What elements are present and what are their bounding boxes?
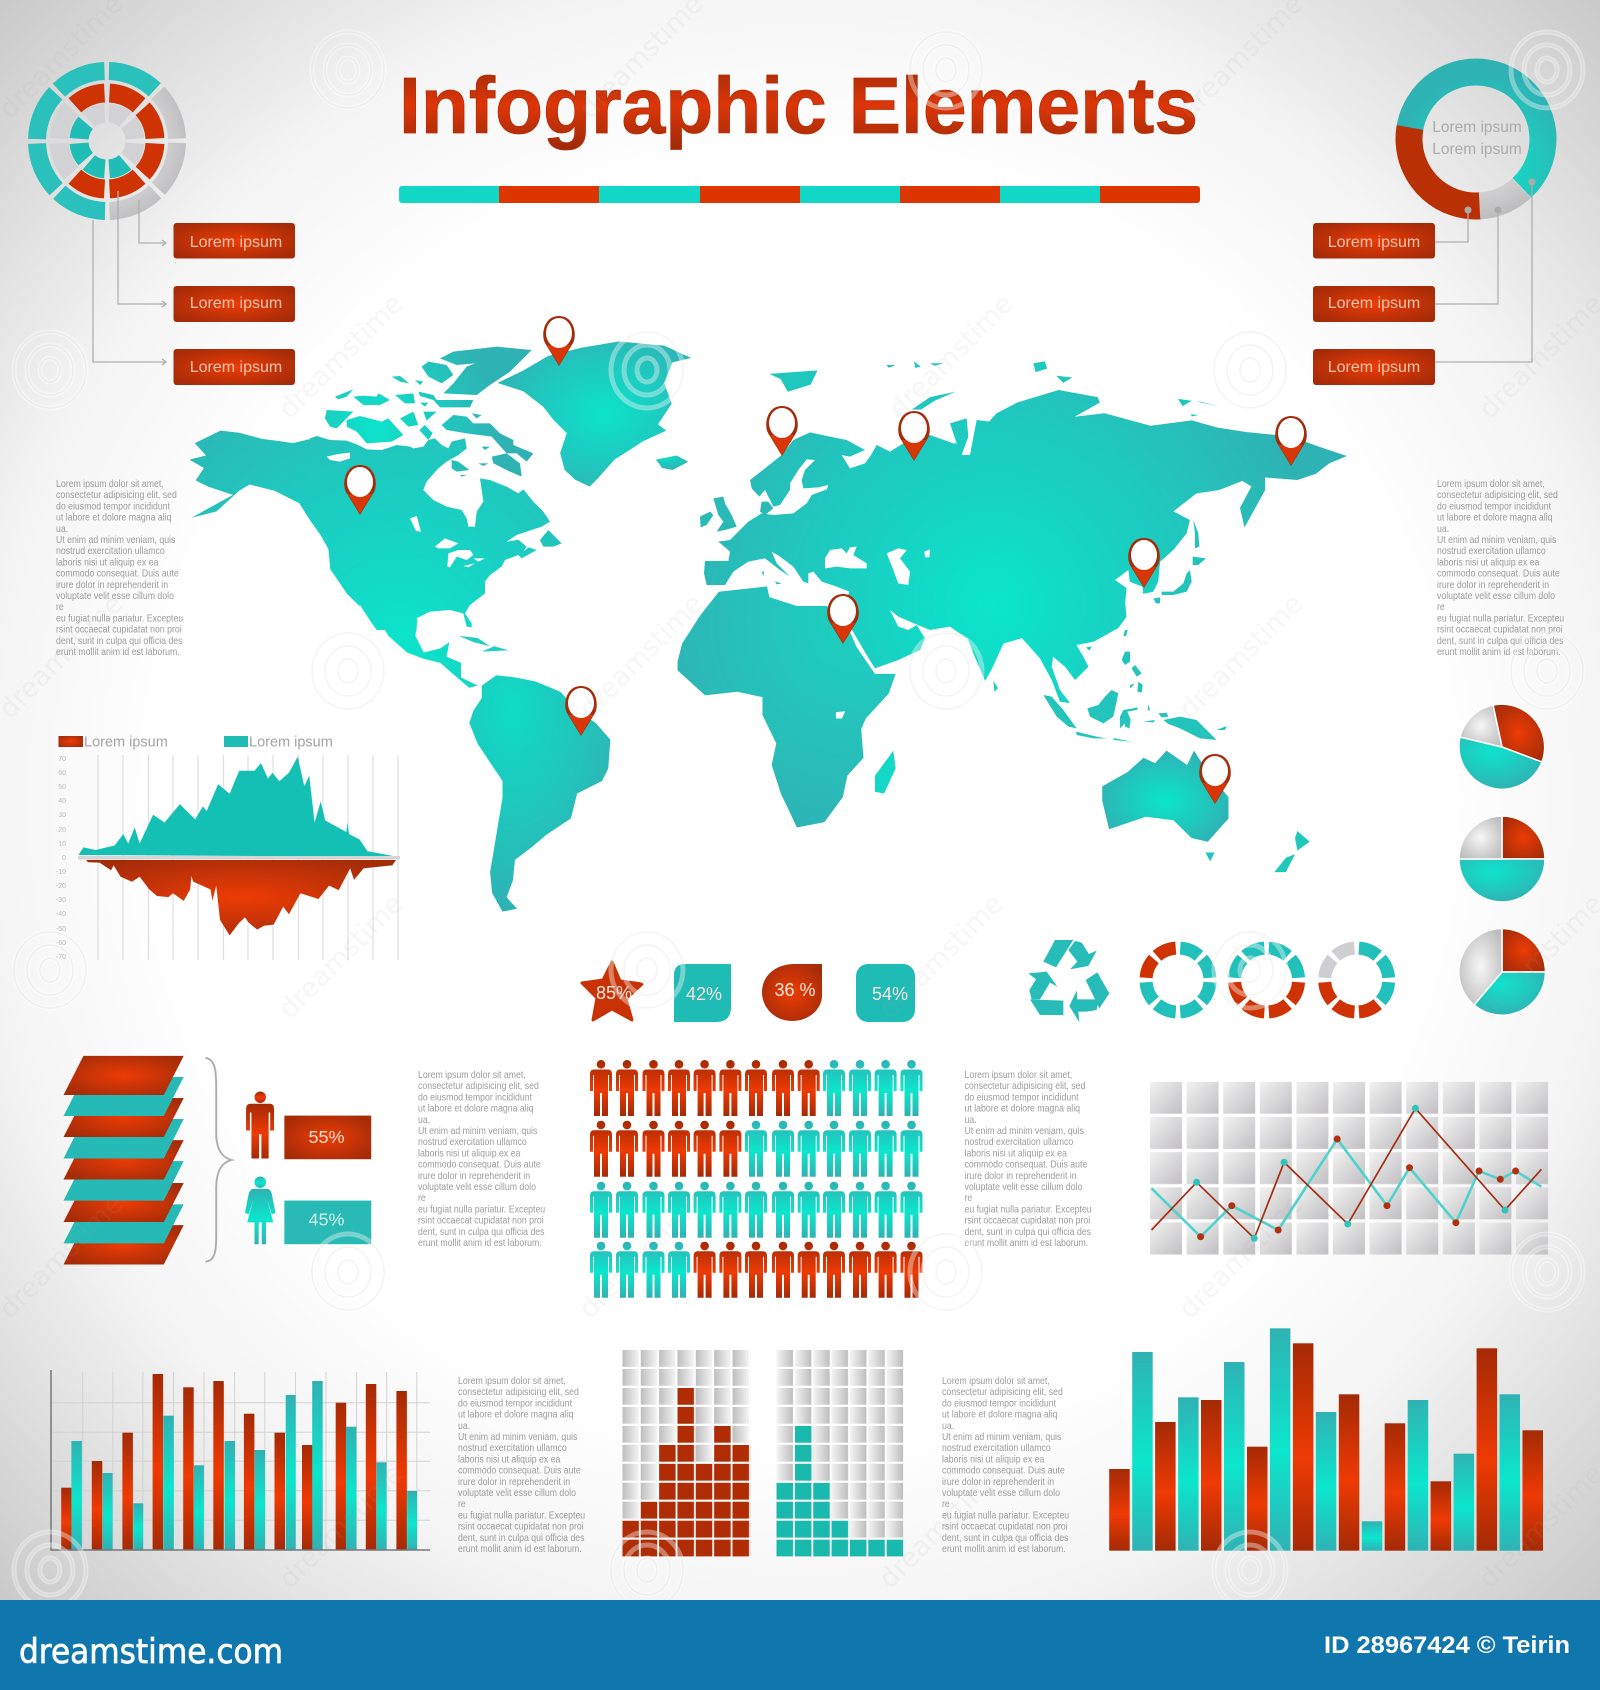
Europe, Russia west and Arabia	[704, 418, 990, 668]
donut chart: top right: Lorem ipsum	[1432, 119, 1522, 136]
text block: right of map: dent, sunt in culpa qui officia des	[1437, 634, 1564, 646]
area chart y axis labels: 20	[58, 827, 66, 834]
text: dreamstime	[883, 288, 1020, 425]
world map	[189, 316, 1347, 912]
text block: left of map: Lorem ipsum dolor sit amet,	[56, 477, 164, 489]
Canadian Arctic islands	[325, 347, 533, 477]
bar chart axes	[51, 1370, 430, 1550]
text block: beside tile charts: do eiusmod tempor incididunt	[942, 1397, 1056, 1409]
pin: Korea	[1128, 538, 1160, 588]
area chart y axis labels: 30	[58, 812, 66, 819]
segmented ring 3	[1312, 935, 1402, 1025]
grouped bar chart	[51, 1370, 430, 1550]
text block: left of map: do eiusmod tempor incididunt	[56, 500, 170, 512]
area chart zero line	[78, 856, 400, 860]
text block: beside people chart: Lorem ipsum dolor sit amet,	[964, 1068, 1072, 1080]
layered stack with gender split	[64, 1056, 371, 1264]
footer logo text: dreamstime.com	[19, 1632, 283, 1672]
text block: left of map: voluptate velit esse cillum dolo	[56, 589, 174, 601]
text block: beside tile charts: irure dolor in reprehenderit in	[942, 1475, 1054, 1487]
text block: beside gender split: do eiusmod tempor incididunt	[418, 1091, 532, 1103]
text block: left of map: ut labore et dolore magna aliq	[56, 511, 172, 523]
text block: left of map: irure dolor in reprehenderit in	[56, 578, 168, 590]
text block: beside grouped bars	[458, 1374, 585, 1554]
people pictogram chart	[590, 1060, 922, 1298]
text block: left of map: ua.	[56, 522, 68, 534]
Africa	[678, 586, 896, 827]
tile column chart: red	[622, 1350, 751, 1556]
map: East and Southeast Asian islands	[1043, 520, 1227, 740]
text: dreamstime	[1173, 1188, 1310, 1325]
text block: left of map: consectetur adipisicing elit, sed	[56, 489, 177, 500]
text block: right of map: ua.	[1437, 522, 1449, 534]
text: dreamstime	[573, 1188, 710, 1325]
text block: beside people chart: irure dolor in reprehenderit in	[964, 1169, 1077, 1181]
label buttons: left	[174, 223, 295, 385]
donut chart: top right: Lorem ipsum	[1432, 141, 1522, 158]
badge: star 85%	[582, 962, 642, 1020]
text block: beside gender split: ua.	[418, 1113, 430, 1125]
area chart y axis labels: -40	[56, 911, 66, 918]
pin: Greenland	[543, 316, 575, 366]
text block: beside gender split: irure dolor in reprehenderit in	[418, 1169, 530, 1181]
area chart y axis labels: -60	[56, 940, 66, 947]
text block: beside grouped bars: consectetur adipisicing elit, sed	[458, 1386, 579, 1397]
connectors: left ring to labels	[93, 191, 166, 365]
text block: beside people chart: dent, sunt in culpa qui officia des	[964, 1225, 1091, 1237]
Lake Victoria	[836, 711, 845, 719]
text block: beside tile charts: commodo consequat. Duis aute	[942, 1464, 1065, 1476]
brace	[206, 1058, 232, 1262]
label buttons: left: Lorem ipsum	[190, 234, 282, 251]
text block: beside grouped bars: irure dolor in reprehenderit in	[458, 1475, 570, 1487]
people row 2	[590, 1121, 922, 1177]
text block: right of map: irure dolor in reprehenderit in	[1437, 578, 1549, 590]
Asia	[967, 390, 1347, 703]
text block: right of map: nostrud exercitation ullamco	[1437, 545, 1546, 556]
label buttons: right: Lorem ipsum	[1328, 359, 1420, 376]
text block: left of map: nostrud exercitation ullamco	[56, 545, 165, 556]
text block: beside people chart: voluptate velit esse cillum dolo	[964, 1180, 1082, 1192]
text block: left of map: Ut enim ad minim veniam, quis	[56, 533, 176, 545]
area chart y axis labels: 70	[58, 756, 66, 763]
label buttons: left: Lorem ipsum	[190, 295, 282, 312]
text block: beside gender split: ut labore et dolore magna aliq	[418, 1102, 534, 1114]
Canada and United States	[310, 436, 550, 630]
pie chart 2	[1459, 816, 1545, 902]
text block: beside tile charts: ua.	[942, 1419, 954, 1431]
area chart y axis labels: 10	[58, 841, 66, 848]
text block: left of map: dent, sunt in culpa qui officia des	[56, 634, 183, 646]
Australia	[1102, 751, 1228, 842]
text block: beside grouped bars: dent, sunt in culpa qui officia des	[458, 1531, 585, 1543]
text block: right of map: rsint occaecat cupidatat non proi	[1437, 623, 1563, 635]
text: dreamstime	[1173, 588, 1310, 725]
inland seas	[825, 547, 930, 585]
label buttons: right: Lorem ipsum	[1328, 295, 1420, 312]
pie chart 3	[1459, 928, 1546, 1015]
text block: right of map: consectetur adipisicing elit, sed	[1437, 489, 1558, 500]
text block: beside people chart: Ut enim ad minim veniam, quis	[964, 1124, 1084, 1136]
pin: Egypt	[827, 594, 859, 644]
text block: right of map: do eiusmod tempor incididunt	[1437, 500, 1551, 512]
segmented ring: top left	[8, 42, 206, 240]
pin: Brazil	[565, 686, 597, 736]
text block: beside gender split: eu fugiat nulla pariatur. Excepteu	[418, 1203, 545, 1215]
text block: beside gender split: commodo consequat. Duis aute	[418, 1158, 541, 1170]
line chart markers	[1193, 1105, 1519, 1242]
text block: beside grouped bars: Ut enim ad minim veniam, quis	[458, 1430, 578, 1442]
red bars	[61, 1374, 407, 1550]
label buttons: right: Lorem ipsum	[1328, 234, 1420, 251]
teal area series	[78, 757, 398, 857]
text block: beside tile charts: re	[942, 1498, 950, 1509]
badge: rounded 54%	[856, 964, 915, 1022]
tile column chart: teal	[776, 1350, 905, 1556]
connectors: donut to labels	[1435, 178, 1536, 362]
text block: left of map: laboris nisi ut aliquip ex ea	[56, 556, 159, 568]
text block: beside tile charts	[942, 1374, 1069, 1554]
red line series	[1152, 1108, 1541, 1238]
area chart y axis labels: 60	[58, 770, 66, 777]
text block: right of map: voluptate velit esse cillum dolo	[1437, 589, 1555, 601]
text block: right of map: erunt mollit anim id est laborum.	[1437, 645, 1561, 657]
text block: beside gender split: nostrud exercitation ullamco	[418, 1136, 527, 1147]
donut chart: top right	[1381, 44, 1571, 234]
tiled line chart	[1150, 1082, 1549, 1255]
icon: man	[246, 1092, 274, 1158]
text block: right of map: ut labore et dolore magna aliq	[1437, 511, 1553, 523]
pie chart 1	[1459, 704, 1545, 789]
badge: star 85%: 85%	[596, 983, 632, 1003]
Madagascar	[875, 751, 896, 794]
map: Canada and the Arctic	[310, 347, 562, 630]
area chart y axis labels: 40	[58, 798, 66, 805]
map: Americas, Greenland and Iceland	[189, 341, 691, 912]
text: dreamstime	[273, 1458, 410, 1595]
text block: beside grouped bars: ua.	[458, 1419, 470, 1431]
title: Infographic Elements	[399, 61, 1198, 150]
text block: right of map: eu fugiat nulla pariatur. Excepteu	[1437, 612, 1564, 624]
area chart y axis labels: -10	[56, 869, 66, 876]
teal bars	[71, 1381, 417, 1550]
footer banner	[0, 1600, 1600, 1690]
text block: beside people chart: consectetur adipisicing elit, sed	[964, 1080, 1085, 1091]
teal line series	[1152, 1139, 1541, 1237]
text block: beside people chart: nostrud exercitation ullamco	[964, 1136, 1073, 1147]
red area series	[86, 860, 396, 935]
text block: beside grouped bars: rsint occaecat cupidatat non proi	[458, 1520, 584, 1532]
text: dreamstime	[273, 288, 410, 425]
text block: beside grouped bars: do eiusmod tempor incididunt	[458, 1397, 572, 1409]
text block: beside grouped bars: re	[458, 1498, 466, 1509]
Caribbean islands	[459, 636, 509, 652]
text block: beside tile charts: dent, sunt in culpa qui officia des	[942, 1531, 1069, 1543]
area chart legend: Lorem ipsum	[84, 734, 168, 750]
area chart y axis labels: 50	[58, 784, 66, 791]
pin: East Russia	[1275, 416, 1307, 466]
male share bar	[284, 1116, 371, 1159]
Alaska, western coast and Central America	[189, 431, 478, 688]
text block: beside people chart: commodo consequat. Duis aute	[964, 1158, 1087, 1170]
text block: left of map: erunt mollit anim id est laborum.	[56, 645, 180, 657]
South America	[469, 675, 610, 912]
text block: beside grouped bars: erunt mollit anim id est laborum.	[458, 1542, 582, 1554]
Iceland	[656, 456, 688, 470]
text block: beside gender split: erunt mollit anim id est laborum.	[418, 1236, 542, 1248]
pin: Norway	[766, 406, 798, 456]
text block: beside gender split: voluptate velit esse cillum dolo	[418, 1180, 536, 1192]
map pins	[344, 316, 1307, 804]
area chart legend	[58, 734, 333, 750]
Newfoundland	[540, 530, 562, 547]
text block: beside tile charts: eu fugiat nulla pariatur. Excepteu	[942, 1509, 1069, 1521]
text block: beside grouped bars: laboris nisi ut aliquip ex ea	[458, 1453, 561, 1465]
text block: right of map: Ut enim ad minim veniam, quis	[1437, 533, 1557, 545]
text block: beside people chart: ut labore et dolore magna aliq	[964, 1102, 1080, 1114]
lakes	[327, 453, 540, 630]
icon: woman	[245, 1176, 276, 1244]
badge: square 42%	[674, 964, 731, 1022]
people row 4	[590, 1242, 922, 1298]
text block: right of map: commodo consequat. Duis aute	[1437, 567, 1560, 579]
text block: beside grouped bars: nostrud exercitation ullamco	[458, 1442, 567, 1453]
area chart legend: Lorem ipsum	[249, 734, 333, 750]
large bar chart	[1109, 1328, 1543, 1551]
text block: beside grouped bars: Lorem ipsum dolor sit amet,	[458, 1374, 566, 1386]
area chart y axis labels: -20	[56, 883, 66, 890]
text block: left of map: eu fugiat nulla pariatur. Excepteu	[56, 612, 183, 624]
area chart	[56, 734, 400, 961]
text: dreamstime	[273, 888, 410, 1025]
pin: Australia	[1199, 754, 1231, 804]
badge: rounded 54%: 54%	[872, 984, 908, 1004]
title colour bar	[399, 186, 1200, 203]
area chart y axis labels: -50	[56, 926, 66, 933]
Greenland	[498, 341, 691, 487]
area chart y axis labels	[56, 756, 66, 961]
smaller islands	[993, 681, 1132, 742]
badge: drop 36%	[762, 964, 822, 1021]
text block: right of map: re	[1437, 601, 1445, 612]
text block: beside tile charts: consectetur adipisicing elit, sed	[942, 1386, 1063, 1397]
area chart y axis labels: -70	[56, 954, 66, 961]
layered stack	[64, 1056, 184, 1264]
text block: beside gender split: dent, sunt in culpa qui officia des	[418, 1225, 545, 1237]
text block: beside tile charts: ut labore et dolore magna aliq	[942, 1408, 1058, 1420]
text: dreamstime	[873, 1458, 1010, 1595]
text block: beside gender split: consectetur adipisicing elit, sed	[418, 1080, 539, 1091]
text block: beside grouped bars: ut labore et dolore magna aliq	[458, 1408, 574, 1420]
text block: beside tile charts: Ut enim ad minim veniam, quis	[942, 1430, 1062, 1442]
area chart y axis labels: 0	[62, 855, 66, 862]
text: dreamstime	[573, 588, 710, 725]
text block: beside gender split: Lorem ipsum dolor sit amet,	[418, 1068, 526, 1080]
text block: beside grouped bars: voluptate velit esse cillum dolo	[458, 1486, 576, 1498]
text block: beside people chart: laboris nisi ut aliquip ex ea	[964, 1147, 1068, 1159]
map: Europe and the Middle East	[700, 418, 990, 668]
text: dreamstime	[873, 888, 1010, 1025]
text block: beside tile charts: nostrud exercitation ullamco	[942, 1442, 1051, 1453]
pin: Canada	[344, 465, 376, 515]
text block: beside tile charts: laboris nisi ut aliquip ex ea	[942, 1453, 1045, 1465]
male share bar: 55%	[308, 1127, 344, 1147]
pin: Russia	[898, 411, 930, 461]
text block: left of map: commodo consequat. Duis aute	[56, 567, 179, 579]
text block: beside grouped bars: eu fugiat nulla pariatur. Excepteu	[458, 1509, 585, 1521]
text block: beside people chart: rsint occaecat cupidatat non proi	[964, 1214, 1090, 1226]
area chart y axis labels: -30	[56, 897, 66, 904]
text block: left of map: rsint occaecat cupidatat non proi	[56, 623, 182, 635]
text block: beside tile charts: Lorem ipsum dolor sit amet,	[942, 1374, 1050, 1386]
segmented ring 1	[1133, 935, 1223, 1025]
text block: beside people chart: ua.	[964, 1113, 977, 1125]
Denmark, British Isles and Mediterranean islands	[700, 497, 782, 584]
text block: beside people chart	[964, 1068, 1092, 1248]
text block: left of map: re	[56, 601, 64, 612]
female share bar: 45%	[308, 1209, 344, 1229]
percentage badges	[582, 962, 915, 1022]
text block: beside grouped bars: commodo consequat. Duis aute	[458, 1464, 581, 1476]
text block: right of map: laboris nisi ut aliquip ex ea	[1437, 556, 1540, 568]
text block: beside gender split: rsint occaecat cupidatat non proi	[418, 1214, 544, 1226]
badge: drop 36%: 36 %	[774, 980, 816, 1000]
footer image id: ID 28967424 © Teirin	[1324, 1632, 1570, 1659]
text block: beside people chart: erunt mollit anim id est laborum.	[964, 1236, 1088, 1248]
text block: right of map	[1437, 477, 1564, 657]
icon: recycle	[1028, 940, 1109, 1022]
text block: beside tile charts: rsint occaecat cupidatat non proi	[942, 1520, 1068, 1532]
text block: beside people chart: re	[964, 1192, 972, 1203]
text block: left of map	[56, 477, 183, 657]
label buttons: left: Lorem ipsum	[190, 359, 282, 376]
people row 1	[590, 1060, 922, 1116]
people row 3	[590, 1182, 922, 1238]
label buttons: right	[1313, 223, 1435, 385]
Tasmania and New Zealand	[1206, 831, 1310, 872]
text block: beside people chart: do eiusmod tempor incididunt	[964, 1091, 1079, 1103]
text block: beside tile charts: erunt mollit anim id est laborum.	[942, 1542, 1066, 1554]
text block: beside gender split: laboris nisi ut aliquip ex ea	[418, 1147, 521, 1159]
text block: beside people chart: eu fugiat nulla pariatur. Excepteu	[964, 1203, 1092, 1215]
text block: beside gender split: Ut enim ad minim veniam, quis	[418, 1124, 538, 1136]
text block: beside gender split: re	[418, 1192, 426, 1203]
text block: beside gender split	[418, 1068, 545, 1248]
map: Africa, Asia and Oceania	[678, 361, 1347, 872]
female share bar	[284, 1201, 371, 1244]
badge: square 42%: 42%	[686, 984, 722, 1004]
Arctic Eurasia islands	[769, 361, 1219, 416]
text block: right of map: Lorem ipsum dolor sit amet,	[1437, 477, 1545, 489]
text block: beside tile charts: voluptate velit esse cillum dolo	[942, 1486, 1060, 1498]
segmented ring 2	[1221, 935, 1312, 1025]
